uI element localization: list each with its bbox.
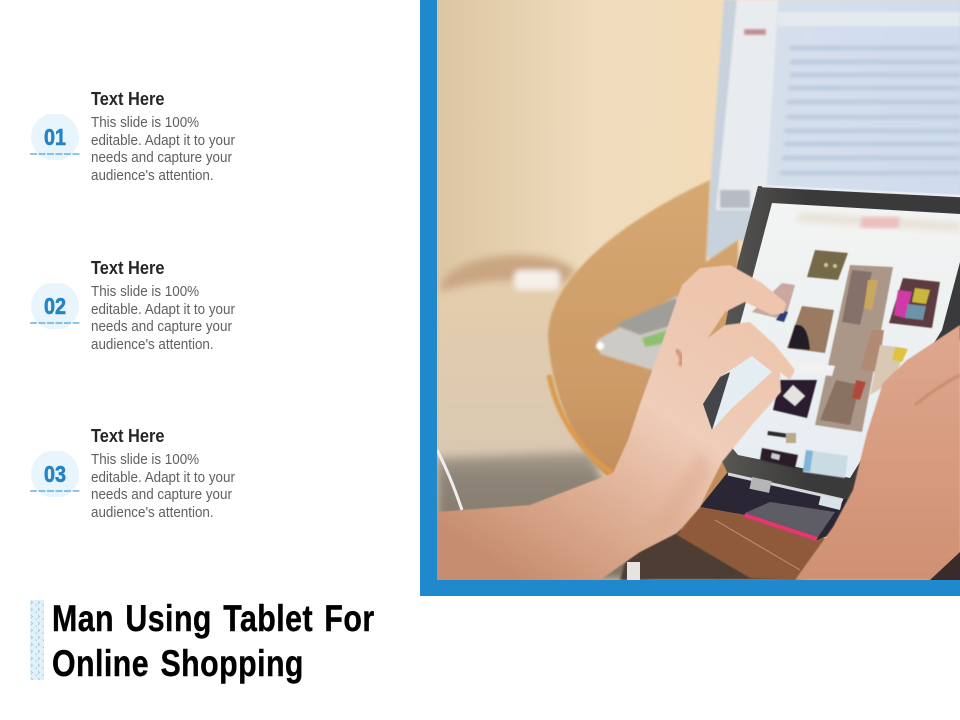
text block 02: needs and capture your <box>91 319 232 335</box>
text block 02: editable. Adapt it to your <box>91 302 235 318</box>
text block 03 <box>91 452 235 521</box>
title accent bar <box>30 600 44 680</box>
gap between fingers and thumb <box>703 356 772 430</box>
text block 02: This slide is 100% <box>91 284 199 300</box>
panel: item 03 <box>30 426 235 521</box>
screen thumbnails <box>752 250 940 478</box>
laptop screen rows <box>780 46 960 175</box>
dark under table <box>620 510 805 580</box>
photo frame <box>420 0 960 596</box>
text block 01: audience's attention. <box>91 168 214 184</box>
tablet body <box>705 186 960 500</box>
badge 01 <box>30 114 80 160</box>
text block 03: This slide is 100% <box>91 452 199 468</box>
text block 01: This slide is 100% <box>91 115 199 131</box>
badge 02 <box>30 283 80 329</box>
table <box>548 180 738 580</box>
text block 02 <box>91 284 235 353</box>
right hand <box>795 325 960 580</box>
text block 03: needs and capture your <box>91 487 232 503</box>
stand and cover <box>700 473 860 540</box>
badge 03: 03 <box>44 461 66 487</box>
chair <box>437 255 600 470</box>
laptop <box>706 0 960 264</box>
text block 03: editable. Adapt it to your <box>91 470 235 486</box>
heading 01: Text Here <box>91 89 164 109</box>
wall <box>437 0 960 580</box>
text block 01 <box>91 115 235 184</box>
text block 02: audience's attention. <box>91 337 214 353</box>
heading 02: Text Here <box>91 258 164 278</box>
panel: item 01 <box>30 89 235 184</box>
text block 01: editable. Adapt it to your <box>91 133 235 149</box>
badge 03 <box>30 451 80 497</box>
badge 01: 01 <box>44 124 66 150</box>
left hand and arm <box>437 265 795 580</box>
wood edge <box>677 507 830 580</box>
photo: hands using tablet <box>437 0 960 580</box>
tablet screen <box>712 203 960 478</box>
title: Online Shopping <box>52 643 304 684</box>
text block 01: needs and capture your <box>91 150 232 166</box>
text block 03: audience's attention. <box>91 505 214 521</box>
heading 03: Text Here <box>91 426 164 446</box>
badge 02: 02 <box>44 293 66 319</box>
title: Man Using Tablet For <box>52 598 375 639</box>
remote <box>596 296 715 372</box>
title <box>52 598 375 684</box>
panel: item 02 <box>30 258 235 353</box>
cable <box>437 450 462 510</box>
floor <box>437 452 650 580</box>
